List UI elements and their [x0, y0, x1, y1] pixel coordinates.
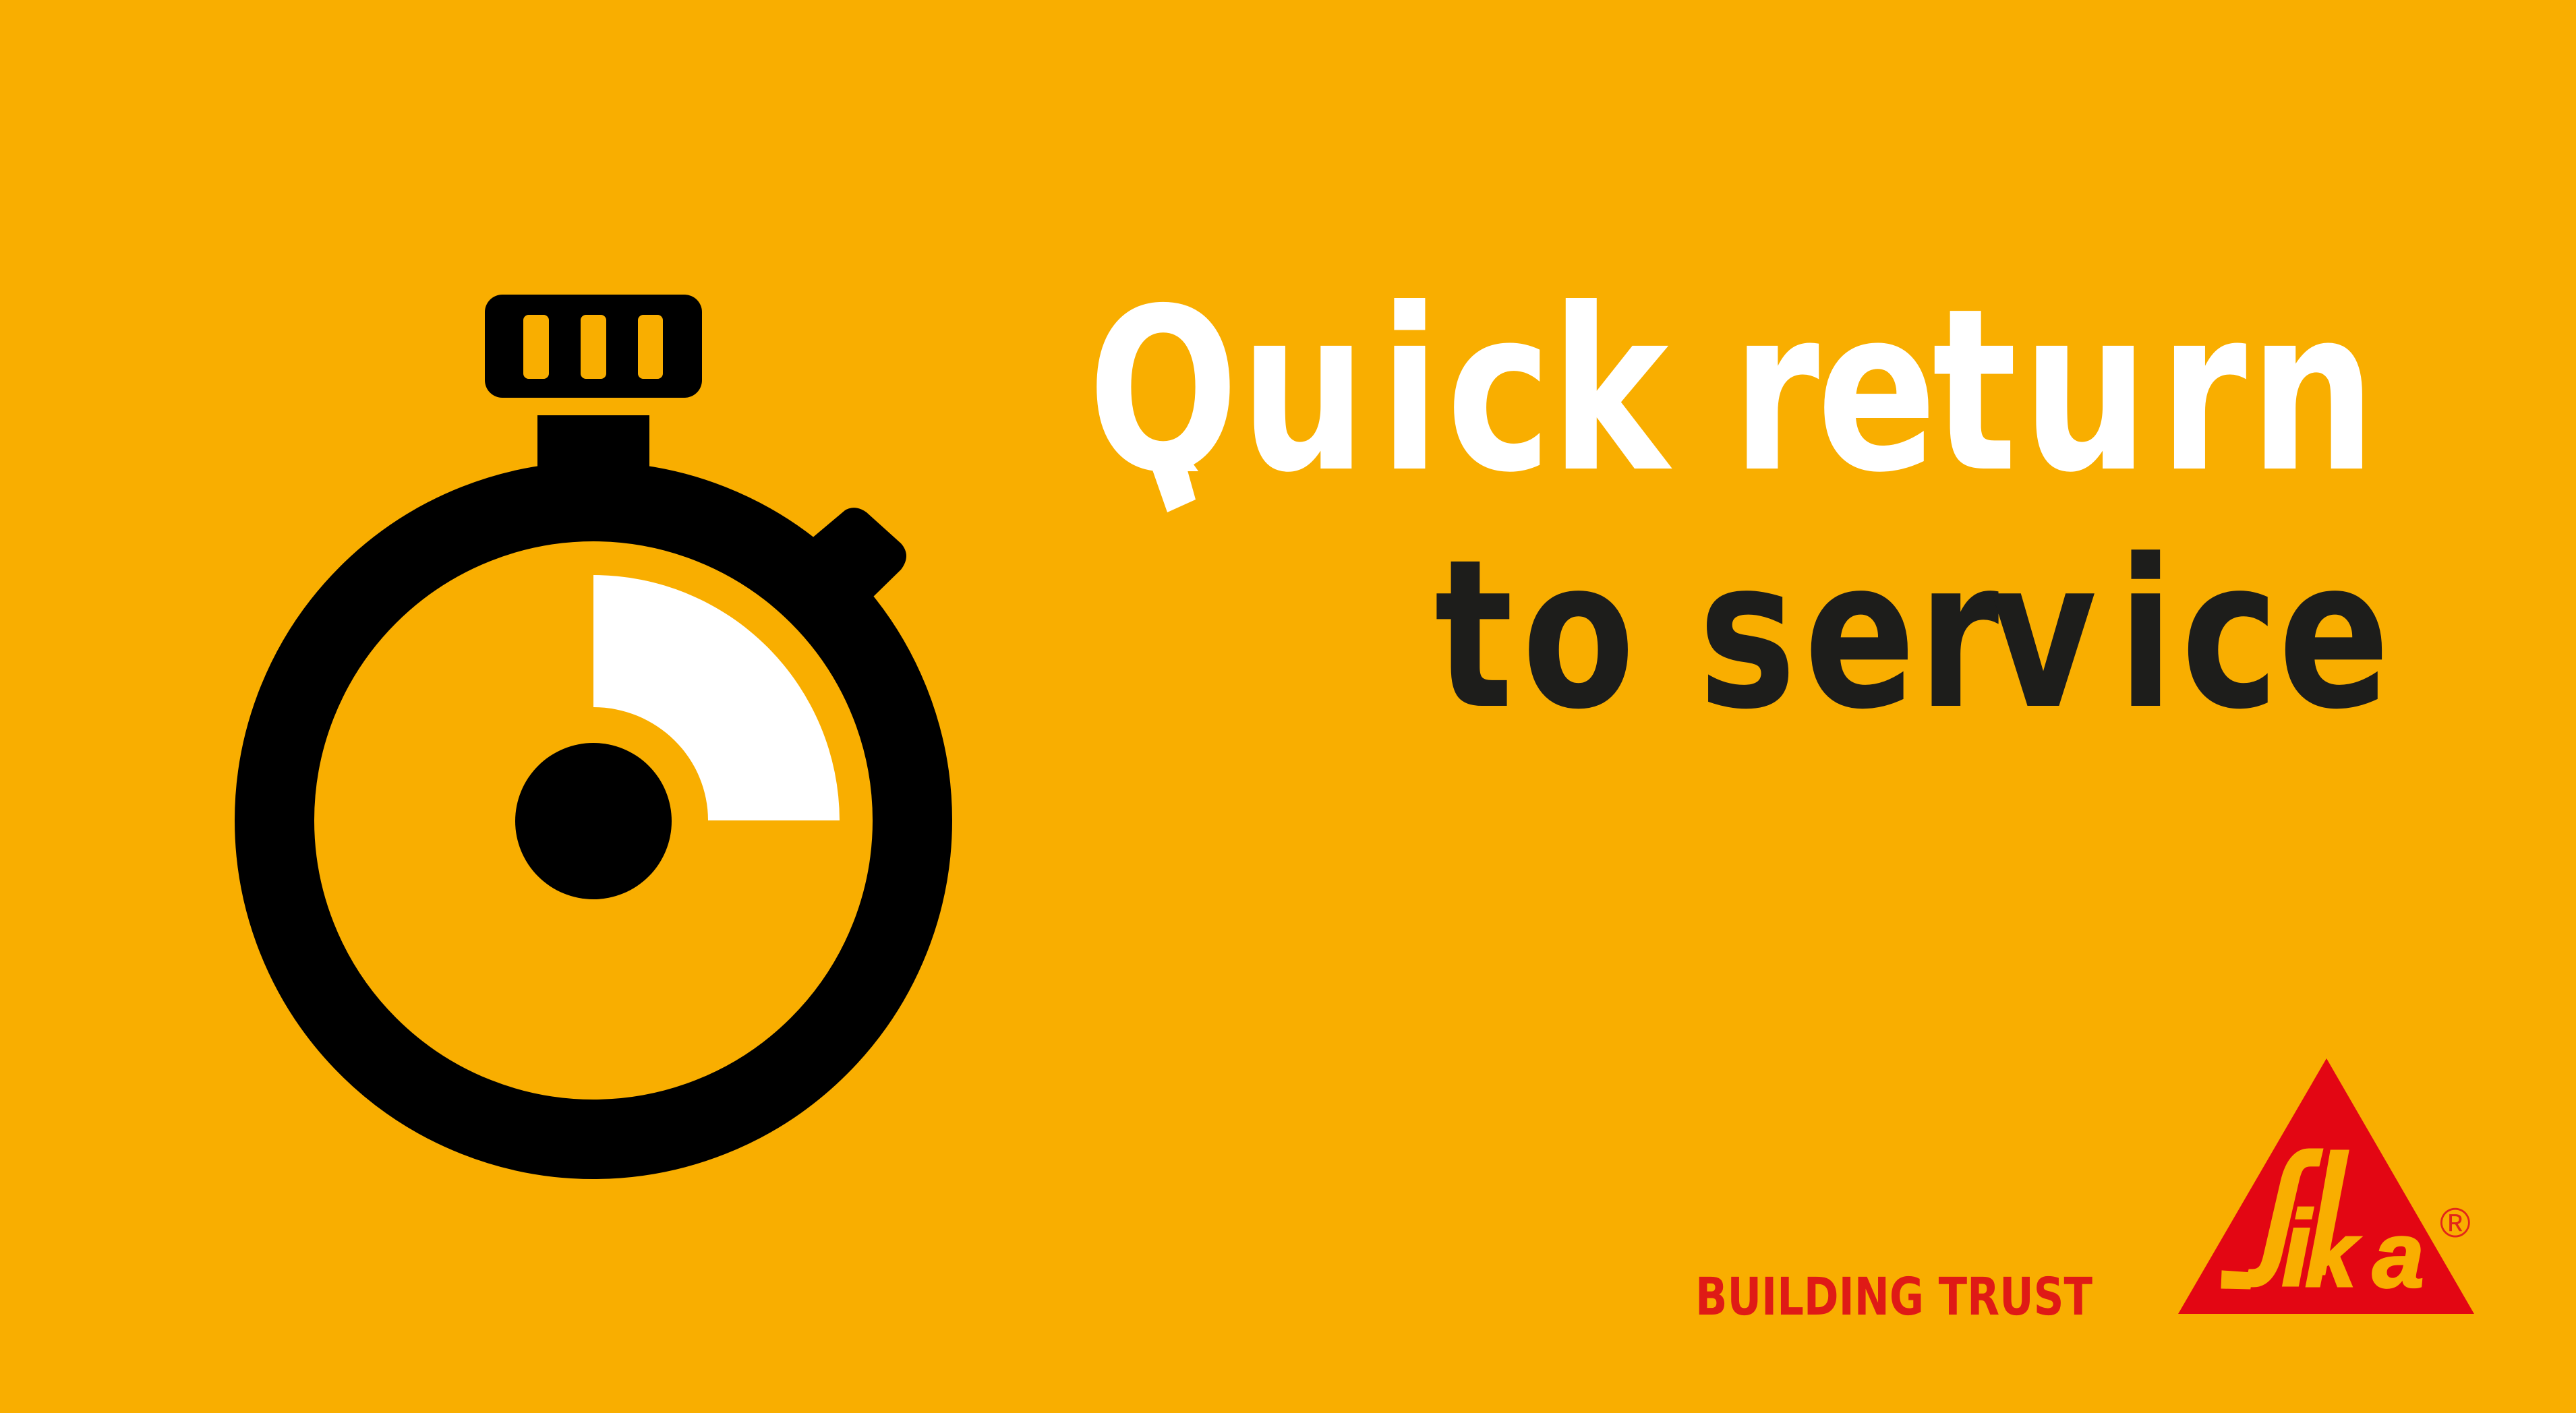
- Q tail: [1140, 458, 1241, 522]
- stopwatch ring: [274, 502, 912, 1139]
- logo wordmark: i: [2281, 1188, 2314, 1309]
- stopwatch hub: [515, 743, 672, 899]
- tagline: BUILDING TRUST: BUILDING TRUST: [1695, 1267, 2092, 1327]
- stopwatch crown: [485, 295, 702, 398]
- logo: Sika: [2178, 1058, 2474, 1314]
- logo triangle: [2178, 1058, 2474, 1314]
- stopwatch side button: [802, 508, 906, 600]
- elapsed time sector: [593, 575, 840, 820]
- logo wordmark: a: [2372, 1203, 2424, 1307]
- registered mark: ®: [2440, 1200, 2471, 1246]
- logo wordmark: ʃ: [2245, 1126, 2328, 1290]
- icon: stopwatch: [274, 295, 912, 1139]
- logo wordmark: k: [2305, 1203, 2361, 1306]
- stopwatch stem: [537, 415, 649, 489]
- logo wordmark: [2222, 1126, 2424, 1309]
- title line 2: to service: to service: [1434, 515, 2390, 754]
- title line 1: Quick return: Quick return: [1088, 260, 2376, 522]
